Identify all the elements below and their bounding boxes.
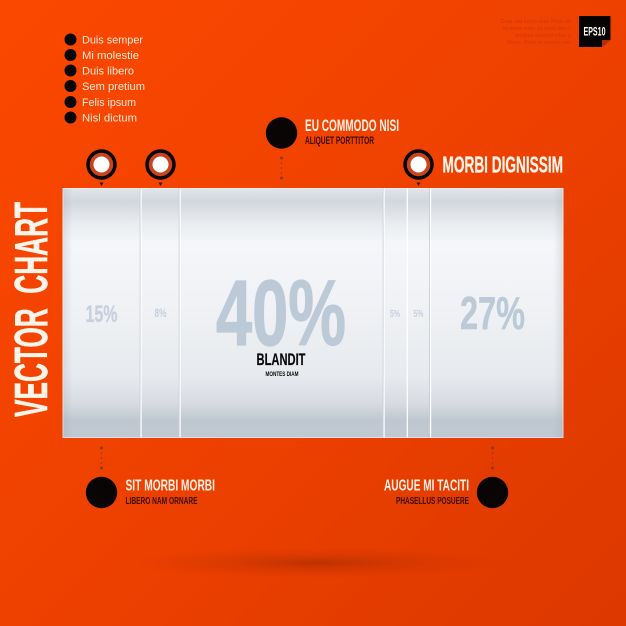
legend item: Duis semper: Duis semper <box>82 34 143 46</box>
callout: Sit morbi morbi: SIT MORBI MORBI <box>126 478 215 494</box>
callout: Augue mi taciti <box>384 446 508 508</box>
callout: Eu commodo nisi: ALIQUET PORTTITOR <box>305 135 374 147</box>
badge: EPS10 <box>579 16 610 47</box>
label: Blandit: BLANDIT <box>256 350 306 369</box>
value: 5% left: 5% <box>390 309 400 320</box>
label: Montes diam: MONTES DIAM <box>266 371 298 378</box>
callout: Eu commodo nisi <box>266 116 399 180</box>
callout: Augue mi taciti: AUGUE MI TACITI <box>384 478 469 494</box>
marker: second segment <box>147 151 174 186</box>
legend item: Duis libero: Duis libero <box>82 66 134 78</box>
legend item: Nisl dictum: Nisl dictum <box>82 112 137 124</box>
small print text: tempus suscipit vitae a <box>515 33 572 39</box>
callout: Sit morbi morbi: LIBERO NAM ORNARE <box>126 496 198 507</box>
value: 5% right: 5% <box>414 309 424 320</box>
value: 27%: 27% <box>460 287 525 339</box>
small print text: libero. Proin et mauris nec <box>507 40 571 46</box>
callout: Eu commodo nisi: EU COMMODO NISI <box>305 116 399 135</box>
value: 8%: 8% <box>154 306 167 320</box>
small print text <box>501 19 572 46</box>
badge: EPS10: EPS10 <box>584 24 606 38</box>
segment dividers <box>140 188 431 438</box>
legend item: Mi molestie: Mi molestie <box>82 50 139 62</box>
value: 15%: 15% <box>86 301 118 328</box>
marker: Morbi dignissim <box>405 151 432 186</box>
legend item: Sem pretium: Sem pretium <box>82 81 145 93</box>
stacked bar panel <box>62 188 564 438</box>
callout: Augue mi taciti: PHASELLUS POSUERE <box>396 496 469 507</box>
legend item: Felis ipsum: Felis ipsum <box>82 97 136 109</box>
value: 40%: 40% <box>216 261 346 365</box>
small print text: sit amet enim sit amet libero <box>503 26 571 32</box>
legend list <box>64 34 145 124</box>
callout: Sit morbi morbi <box>86 446 215 508</box>
small print text: Cras nisi turpis erat. Proin sit <box>501 19 571 25</box>
vertical title: VECTOR CHART <box>5 202 57 417</box>
marker: first segment <box>88 151 115 186</box>
floor shadow <box>128 548 508 578</box>
